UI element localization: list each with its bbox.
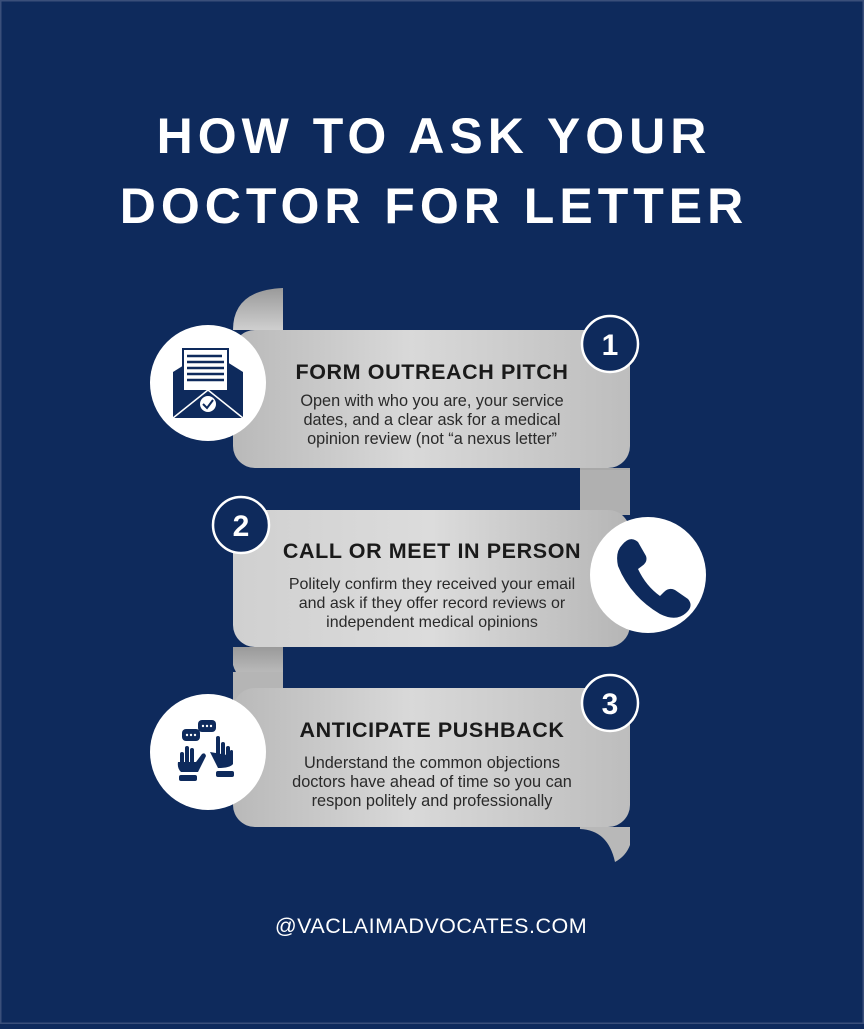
title: DOCTOR FOR LETTER [120, 178, 748, 234]
number badge 2: 2 [233, 510, 249, 543]
panel: step 3 [150, 672, 638, 862]
text: step 2 description: independent medical opinions [326, 614, 538, 631]
number badge 3 [582, 675, 638, 731]
text: step 2 description [289, 576, 575, 631]
text: step 3 description: doctors have ahead of time so you can [292, 773, 572, 791]
number badge 3: 3 [602, 688, 618, 721]
text: step 3 description: Understand the common objections [304, 754, 560, 772]
title: HOW TO ASK YOUR [157, 108, 711, 164]
icon: raised hands with speech bubbles [150, 694, 266, 810]
icon: envelope with letter [150, 325, 266, 441]
text: step 2 description: Politely confirm they received your email [289, 576, 575, 593]
panel: step 1 [150, 288, 638, 505]
text: step 2 description: and ask if they offer record reviews or [299, 595, 566, 612]
heading: anticipate pushback: ANTICIPATE PUSHBACK [299, 718, 565, 742]
text: step 3 description: respon politely and professionally [312, 792, 553, 810]
footer: website: @VACLAIMADVOCATES.COM [275, 914, 587, 938]
text: step 1 description [300, 392, 564, 448]
text: step 1 description: dates, and a clear ask for a medical [303, 411, 561, 429]
text: step 3 description [292, 754, 572, 810]
number badge 2 [213, 497, 269, 553]
heading: call or meet in person: CALL OR MEET IN PERSON [283, 539, 581, 563]
icon: phone [590, 517, 706, 633]
title [120, 108, 748, 234]
panel: step 2 [213, 470, 706, 690]
text: step 1 description: opinion review (not “a nexus letter” [307, 430, 557, 448]
number badge 1 [582, 316, 638, 372]
heading: form outreach pitch: FORM OUTREACH PITCH [296, 360, 568, 384]
text: step 1 description: Open with who you are, your service [300, 392, 564, 410]
number badge 1: 1 [602, 329, 618, 362]
